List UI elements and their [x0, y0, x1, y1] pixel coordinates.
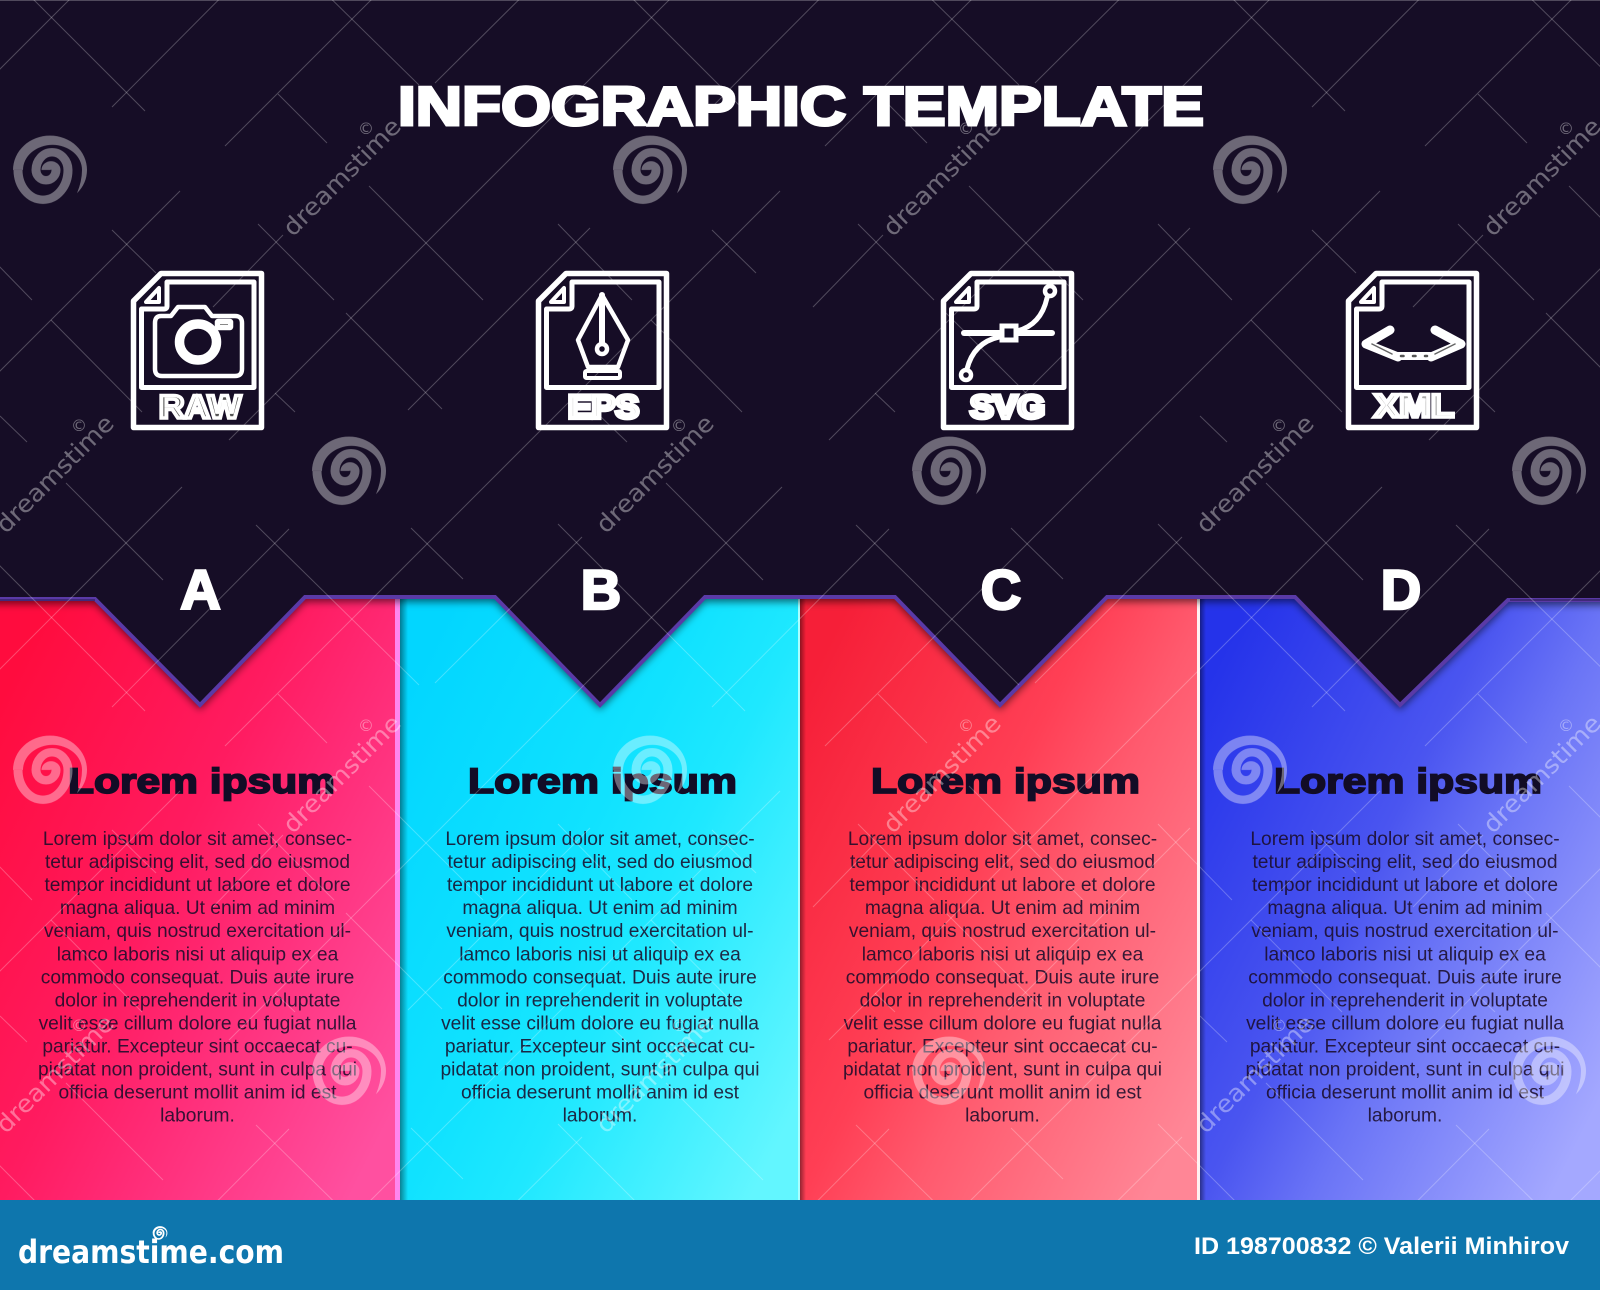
body text A: laborum.: [160, 1106, 235, 1127]
body text A: velit esse cillum dolore eu fugiat nulla: [39, 1013, 357, 1034]
watermark text: dreamstime: [1190, 1009, 1320, 1139]
letter B: B: [581, 558, 621, 621]
title: INFOGRAPHIC TEMPLATE: [398, 75, 1204, 137]
body text A: pariatur. Excepteur sint occaecat cu-: [42, 1036, 353, 1057]
watermark text: dreamstime: [277, 709, 407, 839]
panel: B: [400, 590, 800, 1200]
watermark spirals: [13, 136, 1586, 1101]
body text C: officia deserunt mollit anim id est: [864, 1083, 1142, 1104]
body text D: velit esse cillum dolore eu fugiat nulla: [1246, 1013, 1564, 1034]
body text C: lamco laboris nisi ut aliquip ex ea: [862, 944, 1144, 965]
body text A: magna aliqua. Ut enim ad minim: [60, 898, 335, 919]
watermark text: ©: [1558, 119, 1574, 138]
body text C: commodo consequat. Duis aute irure: [846, 967, 1159, 988]
body text A: dolor in reprehenderit in voluptate: [55, 990, 340, 1011]
body text A: veniam, quis nostrud exercitation ul-: [44, 921, 351, 942]
body text C: dolor in reprehenderit in voluptate: [860, 990, 1145, 1011]
body text C: magna aliqua. Ut enim ad minim: [865, 898, 1140, 919]
body text A: officia deserunt mollit anim id est: [58, 1083, 337, 1104]
body text B: laborum.: [563, 1106, 637, 1127]
body text A: tempor incididunt ut labore et dolore: [44, 875, 351, 896]
watermark text: ©: [358, 716, 374, 735]
body text C: pidatat non proident, sunt in culpa qui: [843, 1060, 1162, 1080]
watermark text: dreamstime: [590, 409, 720, 539]
letter D: D: [1381, 558, 1421, 621]
body text C: laborum.: [965, 1106, 1040, 1127]
body text A: Lorem ipsum dolor sit amet, consec-: [43, 829, 352, 850]
body text D: commodo consequat. Duis aute irure: [1248, 967, 1562, 988]
footer logo: dreamstime.com: [18, 1233, 284, 1271]
watermark text: ©: [1271, 1016, 1287, 1035]
body text D: lamco laboris nisi ut aliquip ex ea: [1264, 944, 1546, 965]
body text B: dolor in reprehenderit in voluptate: [457, 990, 743, 1011]
body text B: tetur adipiscing elit, sed do eiusmod: [447, 852, 753, 873]
body text D: laborum.: [1368, 1106, 1442, 1127]
body text D: dolor in reprehenderit in voluptate: [1262, 990, 1548, 1011]
watermark text: ©: [71, 1016, 87, 1035]
icon: EPS file: [538, 274, 666, 428]
watermark text: ©: [358, 119, 374, 138]
letter C: C: [981, 558, 1021, 621]
body text A: tetur adipiscing elit, sed do eiusmod: [45, 852, 350, 873]
body text D: tetur adipiscing elit, sed do eiusmod: [1252, 852, 1558, 873]
icon: RAW file: [134, 274, 262, 428]
body text B: officia deserunt mollit anim id est: [461, 1083, 740, 1104]
body text C: tempor incididunt ut labore et dolore: [849, 875, 1156, 896]
watermark text: dreamstime: [877, 709, 1007, 839]
body text B: commodo consequat. Duis aute irure: [443, 967, 757, 988]
body text B: veniam, quis nostrud exercitation ul-: [446, 921, 754, 942]
watermark text: ©: [671, 416, 687, 435]
icon: XML file: XML: [1374, 388, 1454, 424]
watermark text: ©: [1558, 716, 1574, 735]
heading B: Lorem ipsum: [468, 762, 737, 801]
icon: RAW file: RAW: [159, 389, 242, 425]
body text A: commodo consequat. Duis aute irure: [41, 967, 354, 988]
body text C: Lorem ipsum dolor sit amet, consec-: [848, 829, 1157, 850]
body text B: Lorem ipsum dolor sit amet, consec-: [445, 829, 755, 850]
body text D: magna aliqua. Ut enim ad minim: [1267, 898, 1543, 919]
watermark text: dreamstime: [590, 1009, 720, 1139]
body text B: velit esse cillum dolore eu fugiat nulla: [441, 1013, 759, 1034]
body text C: pariatur. Excepteur sint occaecat cu-: [847, 1036, 1158, 1057]
footer credit: ID 198700832 © Valerii Minhirov: [1194, 1233, 1569, 1260]
footer bar: [0, 1200, 1600, 1290]
icon: XML file: [1348, 274, 1476, 428]
header band with V notches: [0, 0, 1600, 705]
body text A: pidatat non proident, sunt in culpa qui: [38, 1060, 357, 1080]
watermark text: dreamstime: [277, 112, 407, 242]
watermark text: ©: [958, 716, 974, 735]
body text D: veniam, quis nostrud exercitation ul-: [1251, 921, 1559, 942]
body text C: tetur adipiscing elit, sed do eiusmod: [850, 852, 1155, 873]
heading A: Lorem ipsum: [68, 762, 335, 801]
body text B: pariatur. Excepteur sint occaecat cu-: [445, 1036, 755, 1057]
body text B: tempor incididunt ut labore et dolore: [447, 875, 753, 896]
watermark text: [0, 112, 1600, 1139]
icon: SVG file: [944, 274, 1072, 428]
body text D: officia deserunt mollit anim id est: [1266, 1083, 1545, 1104]
panel: D: [1200, 590, 1600, 1200]
heading C: Lorem ipsum: [871, 762, 1140, 801]
body text D: pariatur. Excepteur sint occaecat cu-: [1250, 1036, 1560, 1057]
letter A: A: [180, 558, 221, 621]
body text D: tempor incididunt ut labore et dolore: [1252, 875, 1558, 896]
body text C: velit esse cillum dolore eu fugiat nulla: [844, 1013, 1162, 1034]
icon: SVG file: SVG: [970, 389, 1045, 425]
body text B: magna aliqua. Ut enim ad minim: [462, 898, 738, 919]
body text D: Lorem ipsum dolor sit amet, consec-: [1250, 829, 1560, 850]
body text C: veniam, quis nostrud exercitation ul-: [849, 921, 1156, 942]
body text A: lamco laboris nisi ut aliquip ex ea: [57, 944, 339, 965]
body text B: lamco laboris nisi ut aliquip ex ea: [459, 944, 741, 965]
body text D: pidatat non proident, sunt in culpa qui: [1246, 1060, 1564, 1080]
watermark text: ©: [1271, 416, 1287, 435]
watermark text: ©: [71, 416, 87, 435]
watermark text: ©: [958, 119, 974, 138]
panel: C: [800, 590, 1200, 1200]
watermark text: dreamstime: [1190, 409, 1320, 539]
panel: A: [0, 590, 400, 1200]
icon: EPS file: EPS: [568, 389, 639, 425]
watermark text: dreamstime: [1477, 112, 1600, 242]
watermark text: dreamstime: [877, 112, 1007, 242]
heading D: Lorem ipsum: [1274, 762, 1542, 801]
watermark text: ©: [671, 1016, 687, 1035]
watermark text: dreamstime: [1477, 709, 1600, 839]
body text B: pidatat non proident, sunt in culpa qui: [441, 1060, 759, 1080]
